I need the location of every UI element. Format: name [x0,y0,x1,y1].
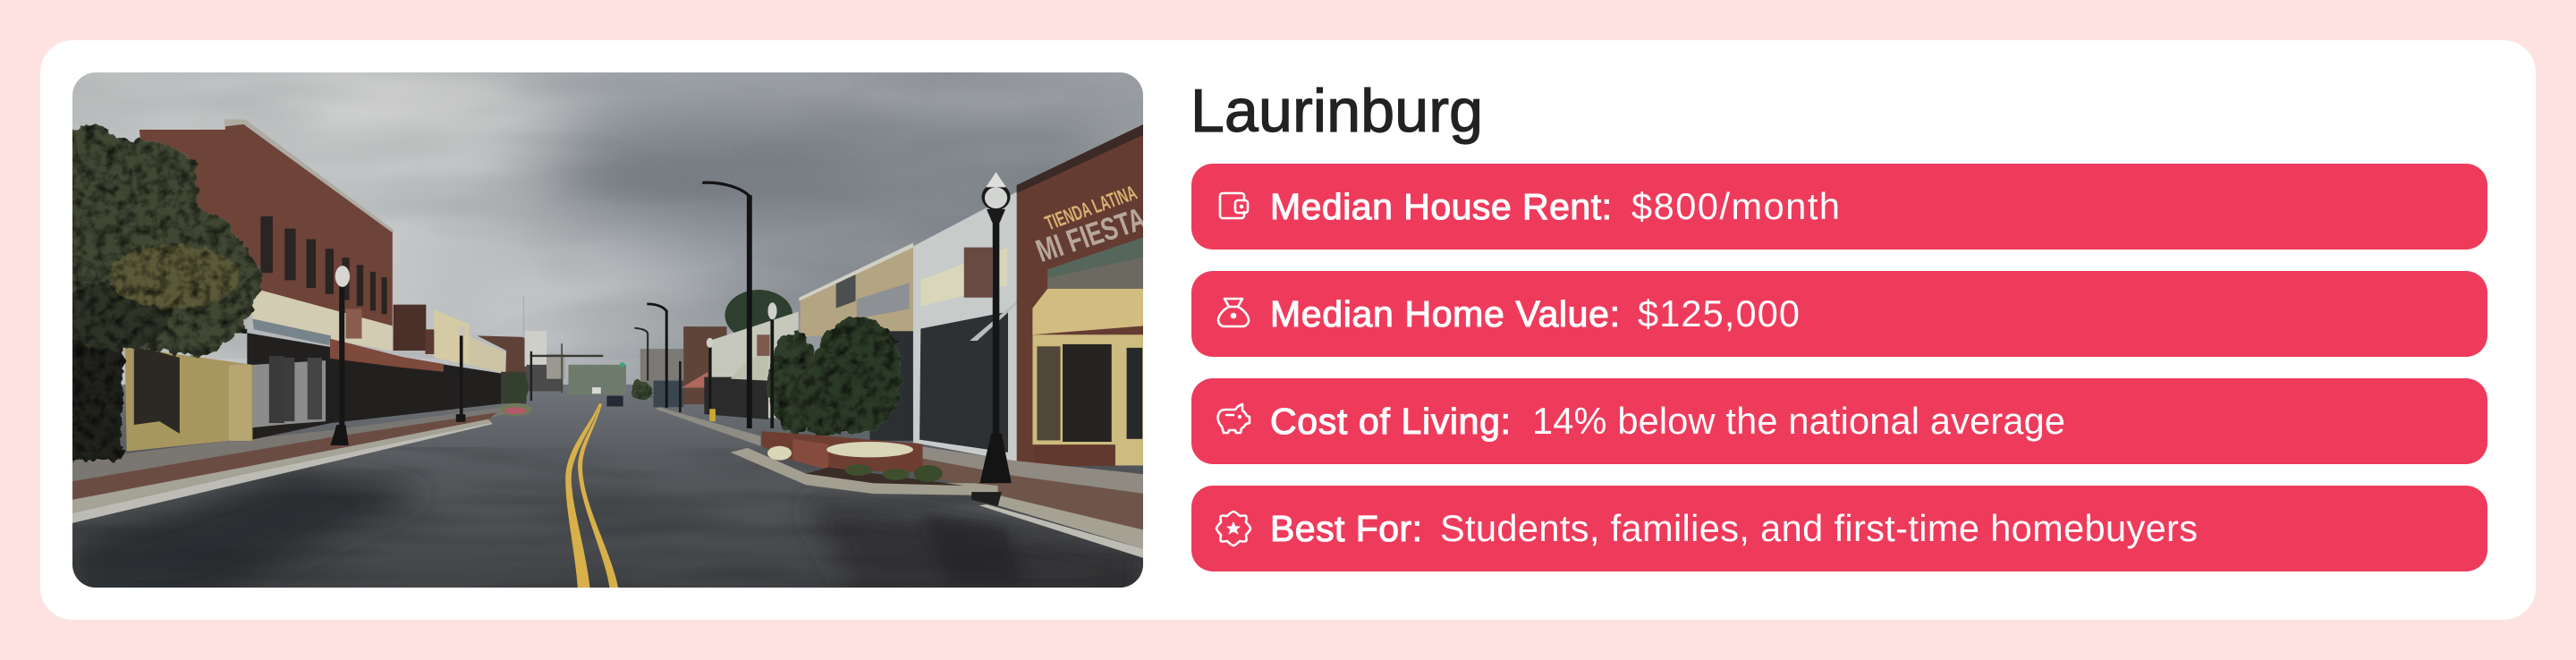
road surface [72,385,1143,599]
photo: rainy main street with brick storefronts [61,63,1150,599]
brick two-storey building [119,120,394,351]
distant tree [724,290,792,333]
tree foliage [61,123,264,461]
right sidewalk and curb [656,407,1145,558]
street lamp foreground right [979,172,1012,483]
white building with dark doors [913,191,1021,462]
label and value: Students, families, and first-time homebuyers [1440,507,2198,549]
label and value: Median Home Value: [1270,293,1620,334]
tan and grey building [799,242,913,441]
wet reflection on road [925,512,1019,580]
storefront row [247,305,626,441]
far traffic signal arm [523,296,625,401]
storefront sign lettering: TIENDA LATINA [1042,182,1140,235]
right half of scene [607,123,1150,584]
Mi Fiesta brick store: MI FIESTA [1031,200,1150,269]
label and value: Best For: [1270,508,1422,549]
street lamp mid right [679,302,777,428]
lower left tan wall [125,345,252,452]
bushes [631,317,903,436]
Mi Fiesta brick store [1017,123,1150,466]
row: median home value [1191,271,2487,357]
far left buildings [640,312,799,419]
label and value: $800/month [1631,185,1840,227]
street lamp mid left [456,326,465,422]
double yellow centre lines [565,403,619,591]
label and value: Median House Rent: [1270,186,1612,227]
row: best for [1191,486,2487,571]
icon: piggy bank [1218,404,1250,433]
row: cost of living [1191,378,2487,464]
icon: star badge [1216,512,1250,546]
row: median house rent [1191,164,2487,250]
icon: money bag [1218,299,1249,326]
street lamp foreground left [330,266,361,445]
tall street light [634,182,750,428]
left half of scene [61,120,626,591]
city heading: Laurinburg [1191,77,1483,145]
icon: wallet [1220,193,1248,218]
sidewalk and curb left [72,407,506,523]
label and value: 14% below the national average [1532,400,2065,442]
label and value: Cost of Living: [1270,401,1511,442]
distant car [608,395,622,406]
brick planters and flowers [761,431,964,486]
label and value: $125,000 [1638,292,1800,334]
